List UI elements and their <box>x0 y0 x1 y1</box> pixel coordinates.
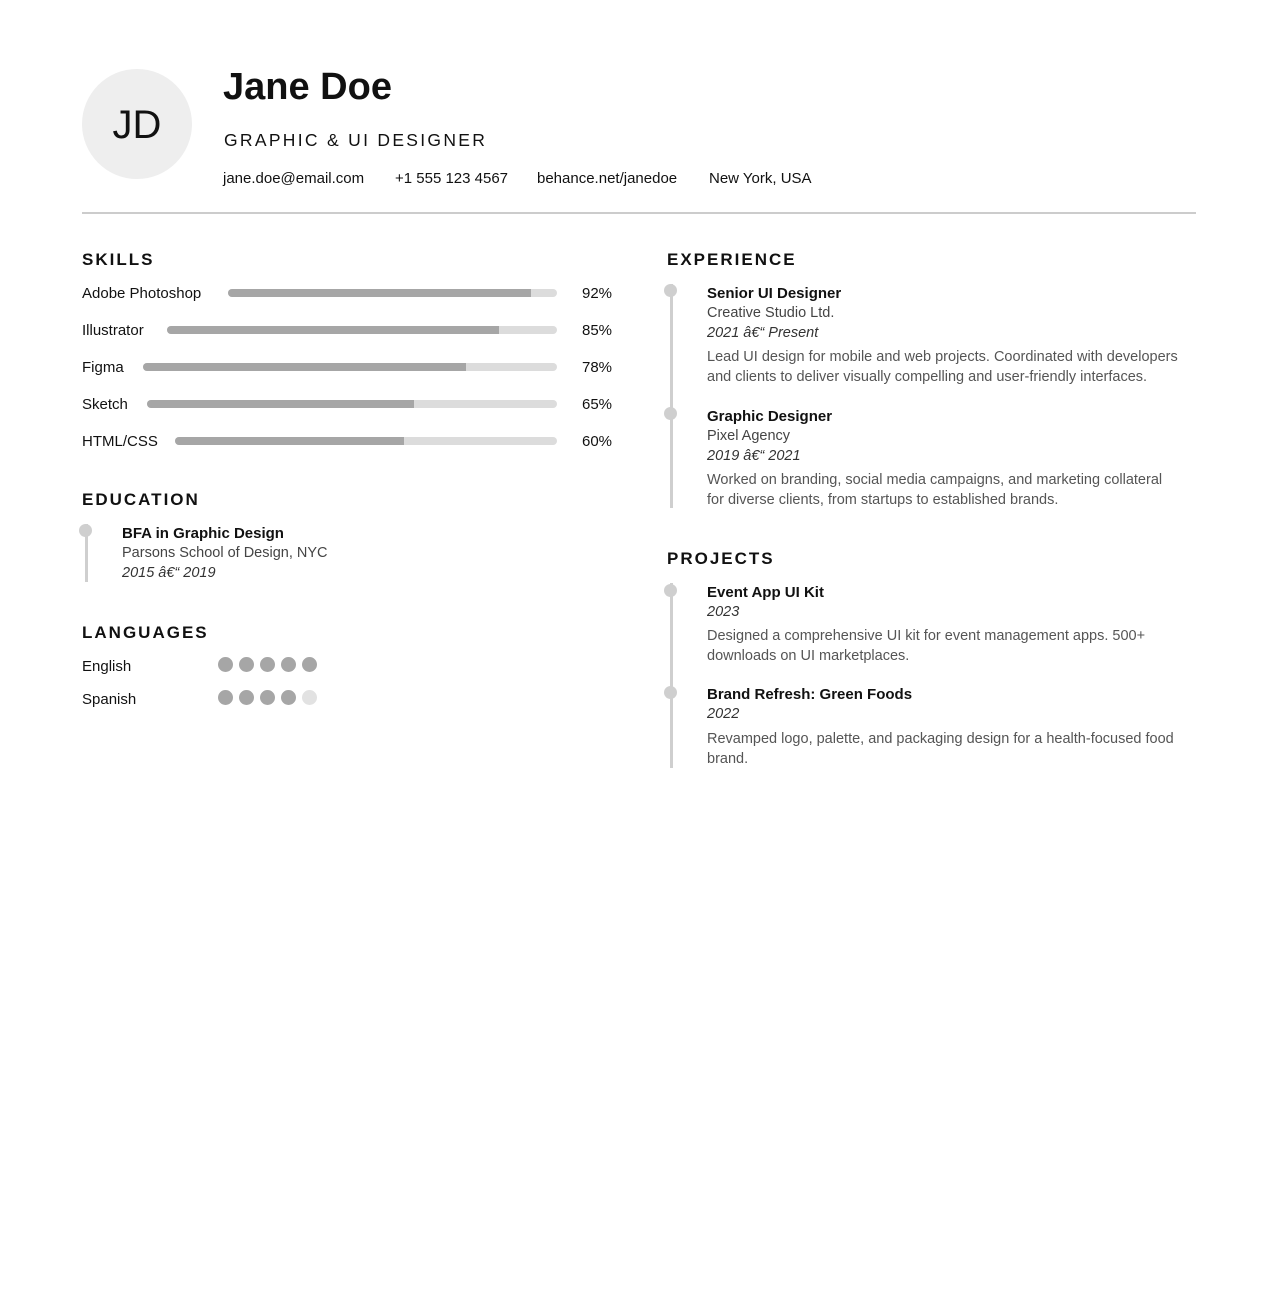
education entry <box>79 524 328 582</box>
avatar <box>82 69 192 179</box>
heading: projects: PROJECTS <box>667 549 775 568</box>
experience timeline: Creative Studio Ltd. <box>707 305 834 321</box>
education entry: 2015 â€“ 2019 <box>122 565 216 581</box>
education entry: Parsons School of Design, NYC <box>122 545 328 561</box>
skill bars: Figma <box>82 359 124 376</box>
experience timeline: Graphic Designer <box>707 408 832 425</box>
projects timeline: Brand Refresh: Green Foods <box>707 686 912 703</box>
heading: experience: EXPERIENCE <box>667 250 797 269</box>
avatar: JD <box>113 103 161 147</box>
projects timeline <box>664 583 1174 768</box>
skill bars: 92% <box>582 285 612 302</box>
skill bars: 85% <box>582 322 612 339</box>
language ratings <box>82 657 317 708</box>
contact info: jane.doe@email.com <box>223 170 364 187</box>
projects timeline: 2022 <box>707 706 739 722</box>
language ratings: Spanish <box>82 691 136 708</box>
contact info: +1 555 123 4567 <box>395 170 508 187</box>
projects timeline: Event App UI Kit <box>707 584 824 601</box>
projects timeline: 2023 <box>707 604 739 620</box>
experience timeline: Lead UI design for mobile and web projects. Coordinated with developers and clients to deliver visually compelling and user-friendly interfaces. <box>707 349 1178 385</box>
experience timeline <box>664 284 1178 508</box>
contact info: behance.net/janedoe <box>537 170 677 187</box>
experience timeline: 2019 â€“ 2021 <box>707 448 801 464</box>
heading: skills: SKILLS <box>82 250 154 269</box>
experience timeline: Senior UI Designer <box>707 285 841 302</box>
language ratings: English <box>82 658 131 675</box>
skill bars: 65% <box>582 396 612 413</box>
experience timeline: Pixel Agency <box>707 428 790 444</box>
education entry: BFA in Graphic Design <box>122 525 284 542</box>
experience timeline: Worked on branding, social media campaigns, and marketing collateral for diverse clients, from startups to established brands. <box>707 472 1162 508</box>
contact info: New York, USA <box>709 170 812 187</box>
heading: education: EDUCATION <box>82 490 200 509</box>
projects timeline: Revamped logo, palette, and packaging design for a health-focused food brand. <box>707 731 1174 767</box>
experience timeline: 2021 â€“ Present <box>707 325 818 341</box>
skill bars: 78% <box>582 359 612 376</box>
skill bars: Adobe Photoshop <box>82 285 201 302</box>
heading: languages: LANGUAGES <box>82 623 209 642</box>
skill bars: Sketch <box>82 396 128 413</box>
skill bars: 60% <box>582 433 612 450</box>
job title: GRAPHIC & UI DESIGNER <box>224 130 487 150</box>
contact info <box>222 170 812 187</box>
skill bars: HTML/CSS <box>82 433 158 450</box>
skill bars: Illustrator <box>82 322 144 339</box>
projects timeline: Designed a comprehensive UI kit for event management apps. 500+ downloads on UI marketplaces. <box>707 628 1145 664</box>
skill bars <box>82 285 612 450</box>
name: Jane Doe <box>223 66 392 108</box>
